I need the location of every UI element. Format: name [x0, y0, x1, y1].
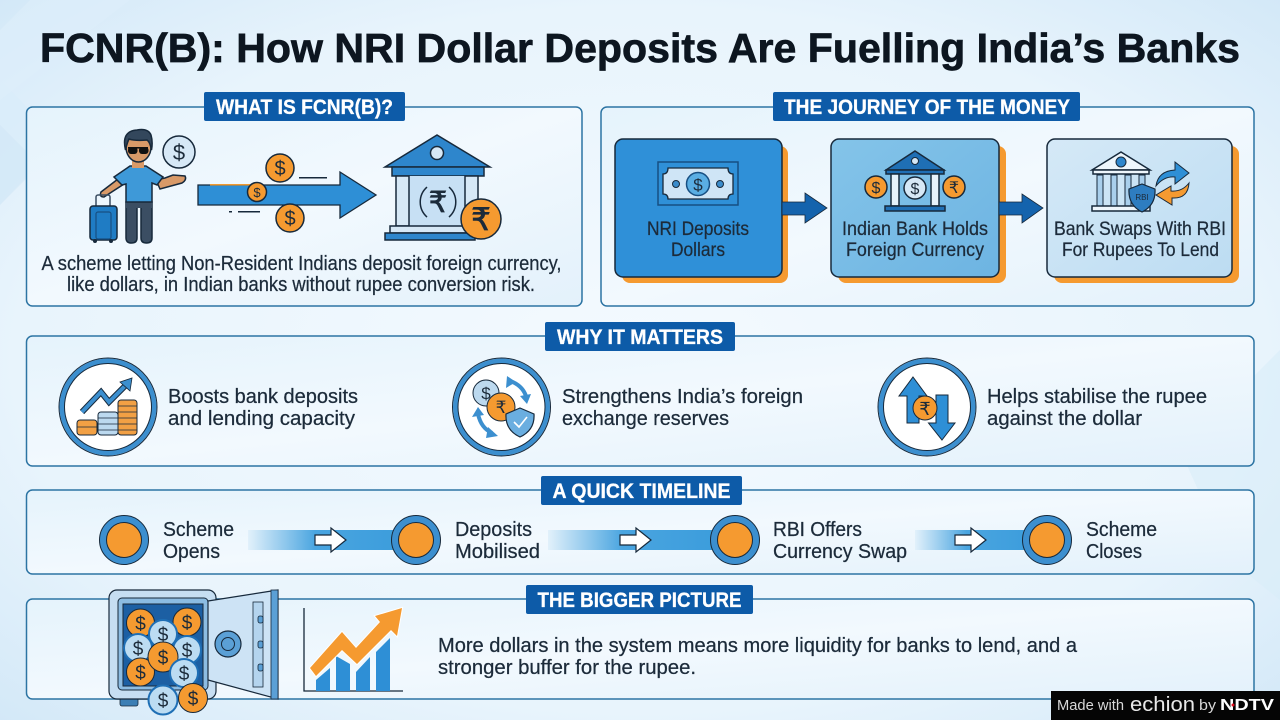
- icon: open safe with coins: $: [133, 639, 144, 660]
- icon: bank with coins: $: [872, 180, 881, 197]
- panel: why it matters: [26, 322, 1254, 466]
- icon: open safe with coins: $: [135, 614, 146, 635]
- icon: up and down arrows with rupee: [878, 358, 976, 456]
- text: boosts bank deposits: Boosts bank deposits: [168, 386, 358, 408]
- connector: opens to mobilised: [248, 528, 398, 552]
- step: bank swaps with RBI: [1047, 139, 1239, 283]
- milestone: RBI offers currency swap: [710, 516, 907, 564]
- step: bank swaps with RBI: For Rupees To Lend: [1062, 239, 1219, 261]
- icon: open safe with coins: [109, 590, 278, 714]
- panel: quick timeline: [26, 476, 1254, 574]
- milestone: scheme closes: Scheme: [1086, 519, 1157, 541]
- icon: banknote: [658, 162, 738, 205]
- step: Indian bank holds foreign currency: Foreign Currency: [846, 239, 984, 261]
- badge: made with echion by NDTV: echion: [1130, 694, 1195, 716]
- badge: made with echion by NDTV: NDTV: [1220, 697, 1274, 714]
- heading: why it matters: WHY IT MATTERS: [557, 326, 723, 349]
- panel: the bigger picture: [26, 585, 1254, 714]
- text: strengthens reserves: exchange reserves: [562, 408, 729, 430]
- text: boosts bank deposits: and lending capacity: [168, 408, 355, 430]
- milestone: scheme closes: [1022, 516, 1157, 564]
- milestone: scheme opens: Opens: [163, 541, 220, 563]
- icon: banknote: $: [693, 176, 703, 194]
- panel: journey of the money: [601, 92, 1254, 306]
- chart: rising bars and arrow: [304, 608, 403, 691]
- milestone: deposits mobilised: Mobilised: [455, 541, 540, 563]
- text: bigger picture summary: stronger buffer for the rupee.: [438, 657, 696, 679]
- arrow: money flow: $: [274, 158, 286, 180]
- badge: made with echion by NDTV: Made with: [1057, 697, 1124, 714]
- text: stabilise the rupee: against the dollar: [987, 408, 1142, 430]
- text: strengthens reserves: [562, 386, 803, 430]
- milestone: scheme closes: Closes: [1086, 541, 1142, 563]
- icon: traveller with suitcase: $: [173, 140, 185, 165]
- badge: made with echion by NDTV: by: [1199, 697, 1217, 714]
- icon: bank with coins: $: [911, 181, 920, 198]
- badge: made with echion by NDTV: [1051, 691, 1280, 720]
- heading: journey of the money: THE JOURNEY OF THE MONEY: [784, 96, 1070, 119]
- icon: open safe with coins: $: [179, 664, 190, 685]
- icon: open safe with coins: $: [158, 691, 169, 712]
- milestone: RBI offers currency swap: RBI Offers: [773, 519, 862, 541]
- text: boosts bank deposits: [168, 386, 358, 430]
- icon: currency cycle and shield: [452, 358, 550, 456]
- icon: growth chart and coin stacks: [59, 358, 157, 456]
- step: NRI deposits dollars: NRI Deposits: [647, 218, 749, 240]
- connector: mobilised to swap: [548, 528, 714, 552]
- step: NRI deposits dollars: [615, 139, 788, 283]
- text: stabilise the rupee: Helps stabilise the rupee: [987, 386, 1207, 408]
- icon: bank with coins: ₹: [949, 180, 959, 197]
- icon: open safe with coins: $: [158, 625, 169, 646]
- arrow: step two to three: [999, 194, 1043, 223]
- title: FCNR(B): How NRI Dollar Deposits Are Fuelling India’s Banks: [40, 25, 1240, 71]
- heading: a quick timeline: A QUICK TIMELINE: [552, 480, 730, 503]
- connector: swap to closes: [915, 528, 1030, 552]
- icon: traveller with suitcase: [90, 130, 195, 243]
- text: scheme description: A scheme letting Non-Resident Indians deposit foreign currency,: [42, 253, 562, 275]
- icon: up and down arrows with rupee: ₹: [919, 399, 931, 419]
- milestone: deposits mobilised: Deposits: [455, 519, 532, 541]
- text: bigger picture summary: More dollars in the system means more liquidity for banks to lend, and a: [438, 635, 1078, 657]
- step: NRI deposits dollars: Dollars: [671, 239, 725, 261]
- step: Indian bank holds foreign currency: Indian Bank Holds: [842, 218, 988, 240]
- arrow: step one to two: [782, 193, 827, 223]
- icon: bank, RBI shield and swap arrows: RBI: [1135, 193, 1149, 202]
- milestone: scheme opens: [100, 516, 234, 564]
- icon: currency cycle and shield: $: [481, 384, 491, 403]
- icon: open safe with coins: $: [182, 613, 193, 634]
- arrow: money flow: $: [253, 185, 261, 200]
- icon: open safe with coins: $: [182, 641, 193, 662]
- icon: currency cycle and shield: ₹: [496, 398, 506, 417]
- icon: bank with rupee coin: [385, 135, 501, 240]
- panel: what is FCNR(B): [26, 92, 582, 306]
- icon: bank with rupee coin: ₹: [429, 187, 447, 219]
- icon: open safe with coins: $: [158, 648, 169, 669]
- heading: the bigger picture: THE BIGGER PICTURE: [538, 589, 742, 612]
- icon: bank with rupee coin: ₹: [471, 202, 491, 237]
- step: Indian bank holds foreign currency: [831, 139, 1006, 283]
- text: scheme description: [42, 253, 562, 296]
- milestone: scheme opens: Scheme: [163, 519, 234, 541]
- text: scheme description: like dollars, in Indian banks without rupee conversion risk.: [67, 274, 535, 296]
- text: stabilise the rupee: [987, 386, 1207, 430]
- milestone: deposits mobilised: [392, 516, 540, 564]
- text: strengthens reserves: Strengthens India’s foreign: [562, 386, 803, 408]
- icon: bank, RBI shield and swap arrows: [1092, 152, 1189, 212]
- heading: what is FCNR(B): WHAT IS FCNR(B)?: [216, 96, 393, 119]
- arrow: money flow: [198, 154, 376, 232]
- milestone: RBI offers currency swap: Currency Swap: [773, 541, 907, 563]
- icon: bank with coins: [865, 151, 965, 211]
- step: bank swaps with RBI: Bank Swaps With RBI: [1054, 218, 1226, 240]
- icon: open safe with coins: $: [135, 663, 146, 684]
- text: bigger picture summary: [438, 635, 1078, 679]
- arrow: money flow: $: [284, 208, 296, 230]
- icon: open safe with coins: $: [188, 689, 199, 710]
